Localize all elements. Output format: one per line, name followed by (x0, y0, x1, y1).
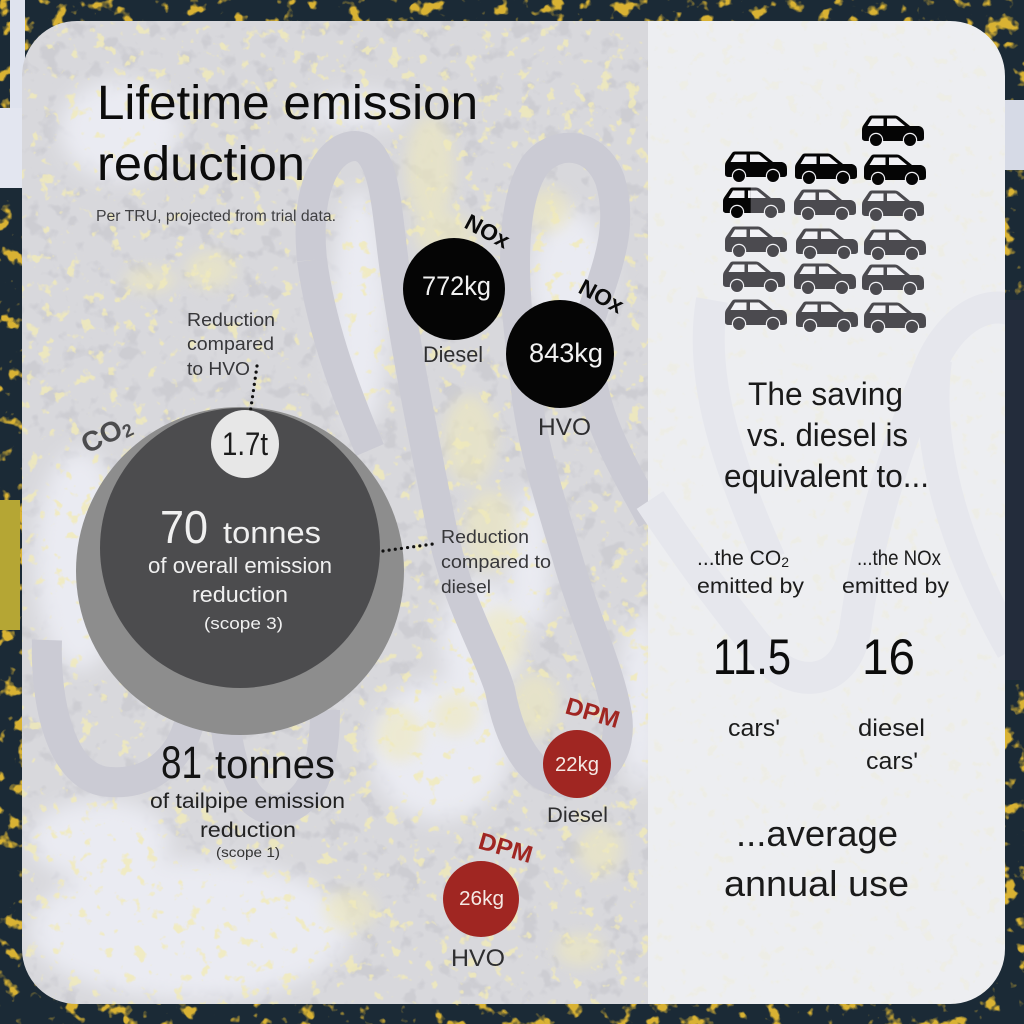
CO2 equivalent column: emitted by (697, 575, 805, 598)
CO2 equivalent column: ...the CO (697, 547, 781, 570)
tailpipe reduction text: of tailpipe emission (150, 789, 345, 813)
heading: saving equivalent (724, 376, 929, 494)
CO2 equivalent column: 2 (781, 554, 789, 570)
tailpipe reduction text: (scope 1) (216, 844, 280, 860)
road strokes (311, 146, 652, 782)
overall reduction text: (scope 3) (204, 614, 283, 633)
NOx equivalent column: 16 (862, 629, 915, 685)
CO2 label: 2 (119, 420, 137, 442)
closing text: average annual use (724, 813, 909, 904)
closing text: average annual use: ...average (736, 813, 898, 854)
icon grid: cars (723, 116, 926, 334)
subtitle: Per TRU, projected from trial data. (96, 208, 336, 225)
CO2 circle chart (76, 407, 404, 735)
title: Lifetime emission (97, 77, 478, 130)
closing text: average annual use: annual use (724, 863, 909, 904)
tailpipe reduction text: reduction (200, 818, 296, 842)
CO2 equivalent column (697, 547, 805, 742)
NOx HVO bubble (506, 274, 628, 441)
tailpipe reduction circle (76, 407, 404, 735)
DPM diesel bubble (543, 693, 623, 827)
NOx diesel bubble: 772kg (422, 271, 491, 301)
CO2 label: CO (76, 413, 127, 459)
callout: reduction compared to HVO: compared (187, 333, 274, 354)
callout: reduction compared to diesel: compared to (441, 551, 551, 572)
overall reduction text: reduction (192, 582, 288, 607)
title (97, 77, 478, 191)
DPM HVO bubble: HVO (451, 945, 505, 972)
DPM HVO bubble: 26kg (459, 888, 504, 910)
overall reduction text: tonnes (223, 515, 321, 550)
NOx diesel bubble (403, 209, 514, 367)
overall reduction text: of overall emission (148, 553, 332, 578)
callout: reduction compared to diesel: diesel (441, 576, 491, 597)
NOx equivalent column (842, 547, 950, 775)
DPM HVO bubble (443, 828, 536, 972)
overall reduction text: 70 (160, 501, 208, 553)
title: reduction (97, 138, 305, 191)
tailpipe reduction text: tonnes (215, 743, 335, 787)
callout: reduction compared to HVO: Reduction (187, 309, 275, 330)
DPM HVO bubble: DPM (475, 828, 536, 869)
overall reduction text (148, 501, 332, 633)
callout: reduction compared to diesel: Reduction (441, 526, 529, 547)
overall reduction circle (100, 408, 380, 688)
NOx equivalent column: emitted by (842, 575, 950, 598)
callout: reduction compared to HVO (187, 309, 275, 414)
heading: saving equivalent: vs. diesel is (747, 417, 908, 453)
HVO reduction circle (211, 410, 279, 478)
CO2 equivalent column: cars' (728, 715, 780, 742)
NOx HVO bubble: 843kg (529, 338, 603, 368)
tailpipe reduction text (150, 737, 345, 860)
heading: saving equivalent: The saving (748, 376, 903, 412)
NOx HVO bubble: HVO (538, 414, 591, 441)
NOx equivalent column: cars' (866, 748, 918, 775)
NOx equivalent column: ...the NOx (857, 547, 941, 570)
callout: reduction compared to diesel (383, 526, 551, 597)
right lighter panel (648, 21, 1012, 1004)
NOx diesel bubble: NOx (461, 209, 514, 254)
DPM diesel bubble: 22kg (555, 754, 599, 776)
NOx diesel bubble: Diesel (423, 342, 483, 367)
NOx HVO bubble: NOx (575, 274, 628, 319)
DPM diesel bubble: DPM (562, 693, 623, 734)
heading: saving equivalent: equivalent to... (724, 458, 929, 494)
callout: reduction compared to HVO: to HVO (187, 358, 250, 379)
tailpipe reduction text: 81 (161, 737, 202, 788)
HVO reduction circle: 1.7t (222, 426, 268, 462)
left photo panel (22, 21, 660, 1004)
NOx equivalent column: diesel (858, 715, 925, 742)
DPM diesel bubble: Diesel (547, 804, 608, 827)
CO2 equivalent column: 11.5 (713, 629, 791, 685)
